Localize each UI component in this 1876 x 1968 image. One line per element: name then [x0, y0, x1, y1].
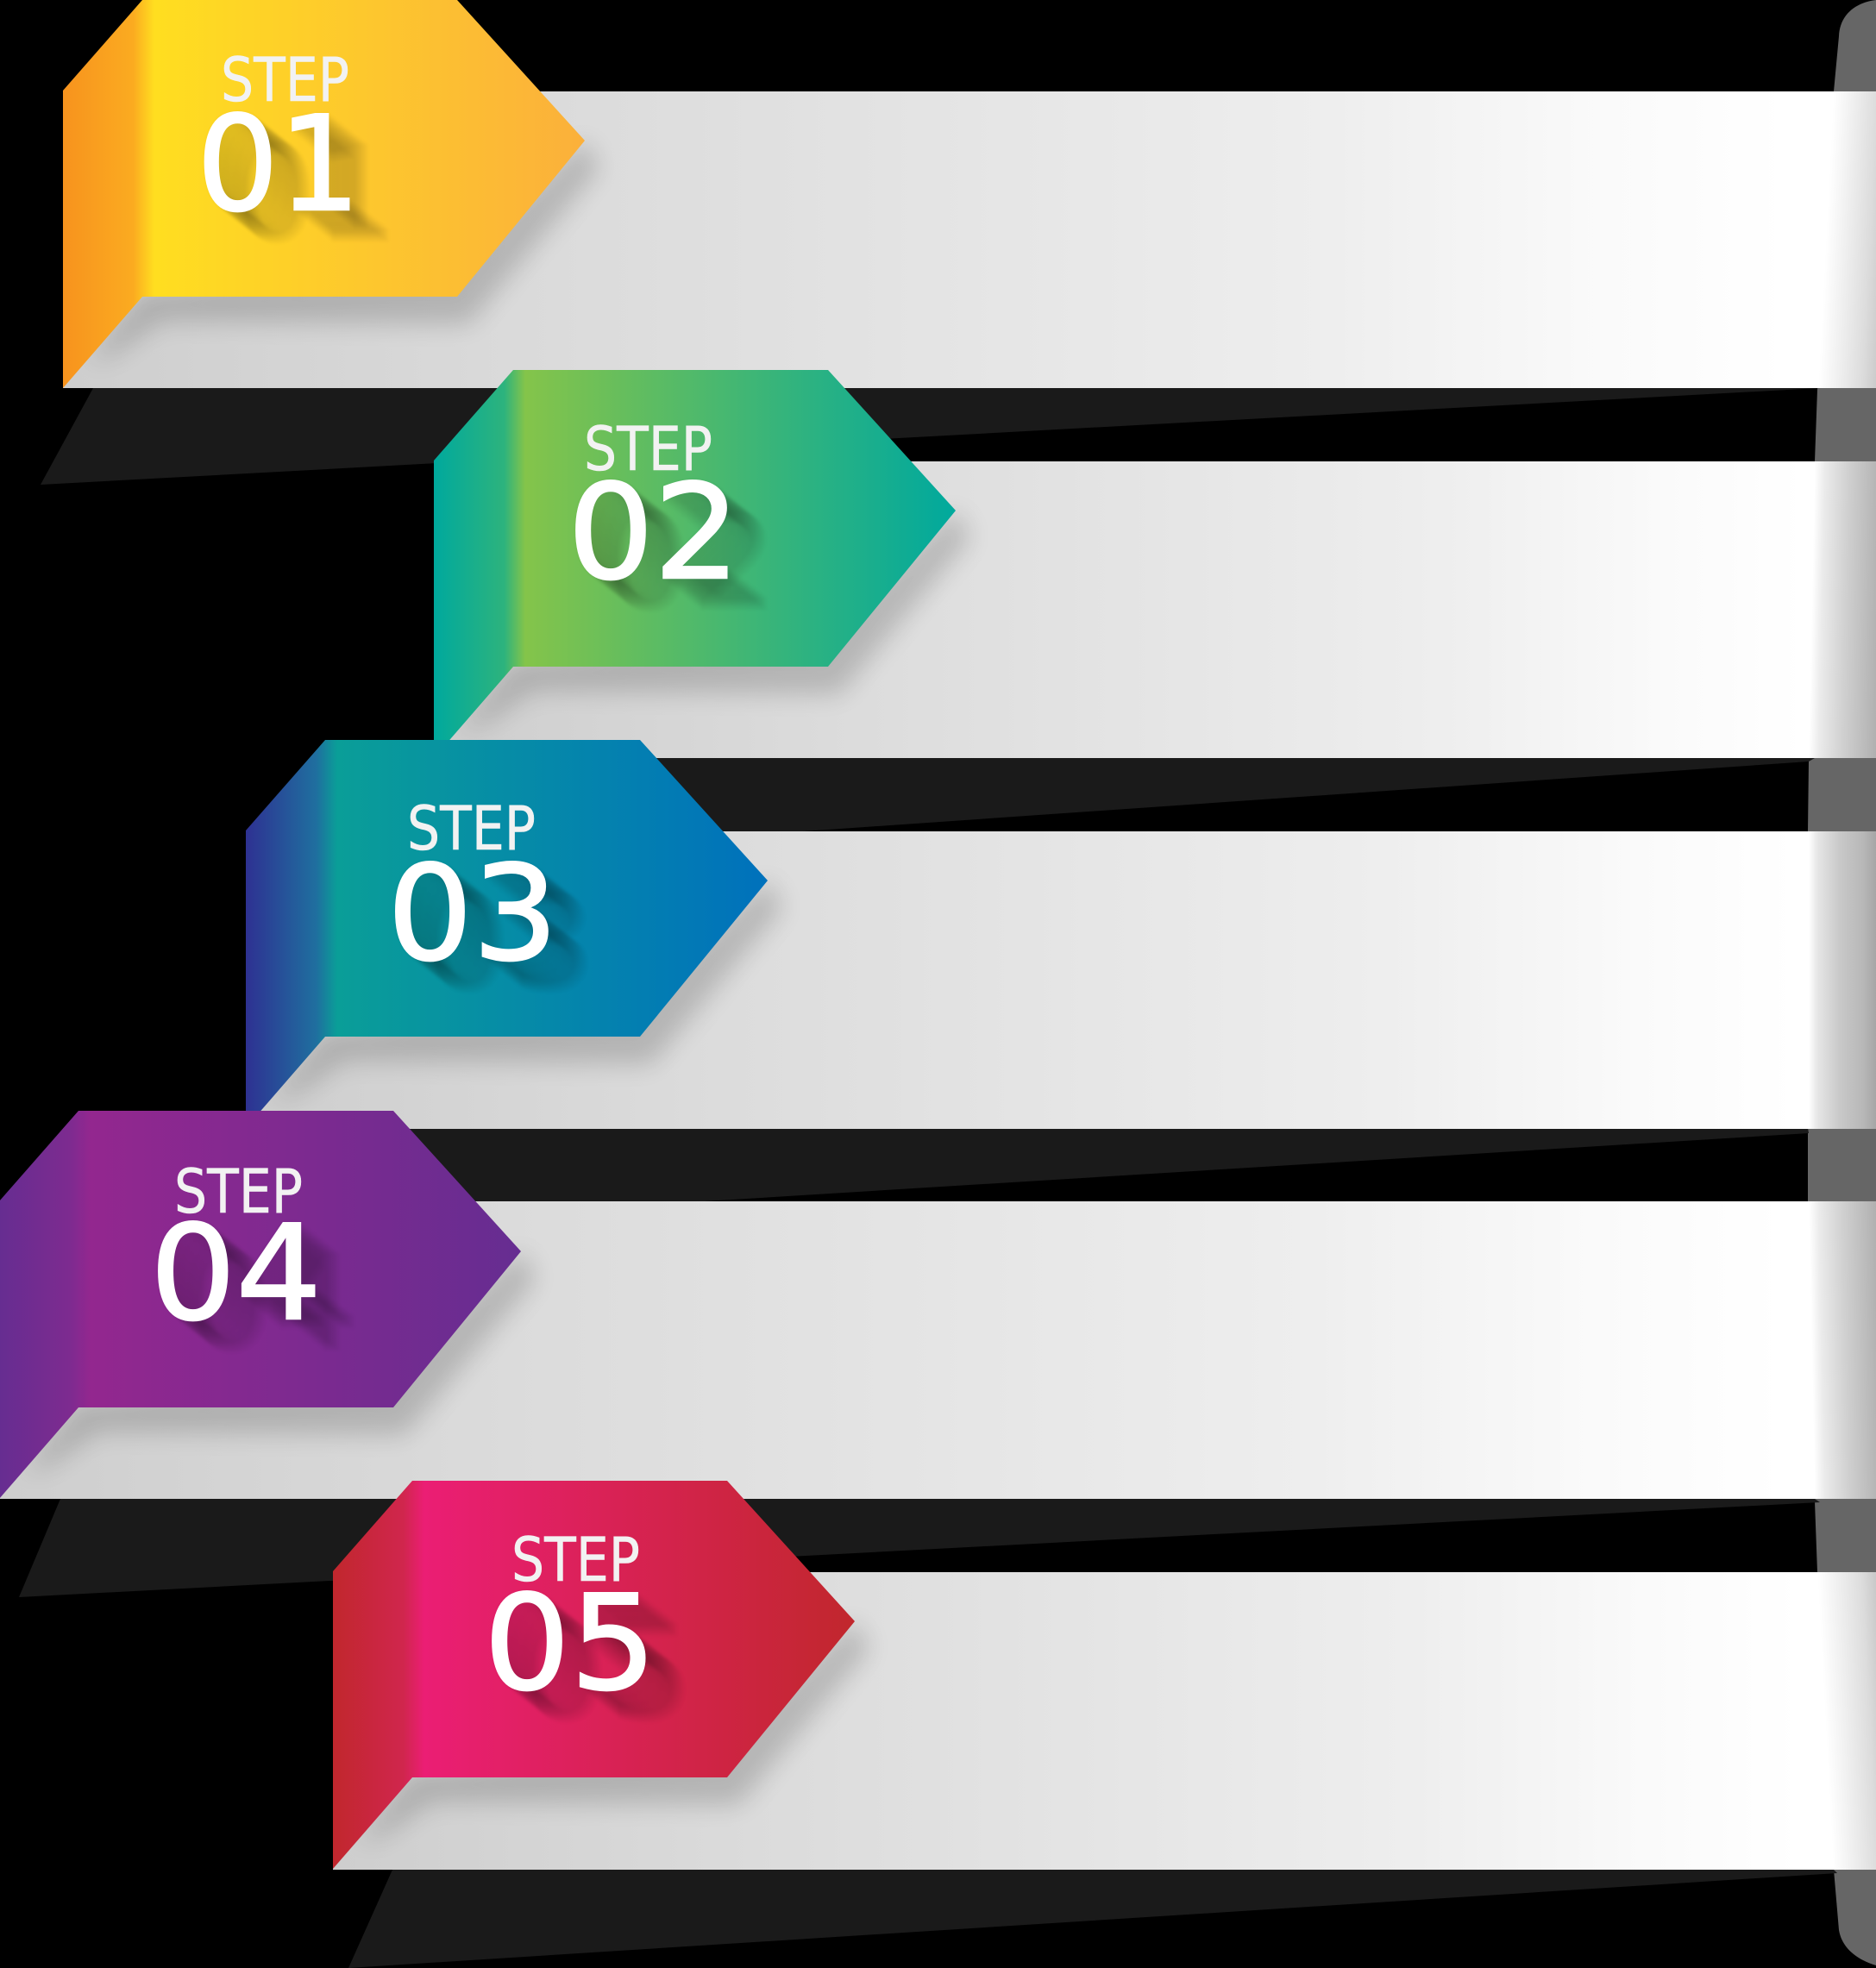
band 1: [63, 91, 1876, 388]
row 5: step 05: [333, 1481, 1876, 1968]
step number: 02: [568, 456, 740, 609]
step number: 03: [387, 837, 558, 990]
row 2: step 02: [434, 370, 1876, 845]
step number: 05: [484, 1567, 656, 1720]
row 1: step 01: [41, 0, 1876, 485]
row 3: step 03: [246, 740, 1876, 1225]
cast shadow under band 4: [19, 1499, 1820, 1597]
step 03 tag: [246, 740, 782, 1128]
step label: STEP: [584, 414, 712, 485]
band 4: [0, 1201, 1876, 1499]
band 2: [434, 461, 1876, 758]
band 5: [333, 1572, 1876, 1870]
step label: STEP: [174, 1156, 303, 1227]
step number: 01: [197, 88, 361, 241]
step 04 tag: [0, 1111, 536, 1499]
cast shadow under band 2: [604, 758, 1815, 845]
step number: 04: [150, 1197, 322, 1350]
step label: STEP: [221, 45, 349, 116]
step 05 tag: [333, 1481, 869, 1869]
step 01 tag: [63, 0, 599, 388]
step label: STEP: [407, 793, 536, 864]
cast shadow under band 5: [348, 1870, 1837, 1968]
row 4: step 04: [0, 1111, 1876, 1597]
step label: STEP: [511, 1525, 640, 1595]
cast shadow under band 3: [328, 1128, 1809, 1225]
curved grey spine behind the bands: [1808, 0, 1876, 1965]
band 3: [246, 831, 1876, 1129]
step 02 tag: [434, 370, 970, 758]
cast shadow under band 1: [41, 388, 1820, 485]
